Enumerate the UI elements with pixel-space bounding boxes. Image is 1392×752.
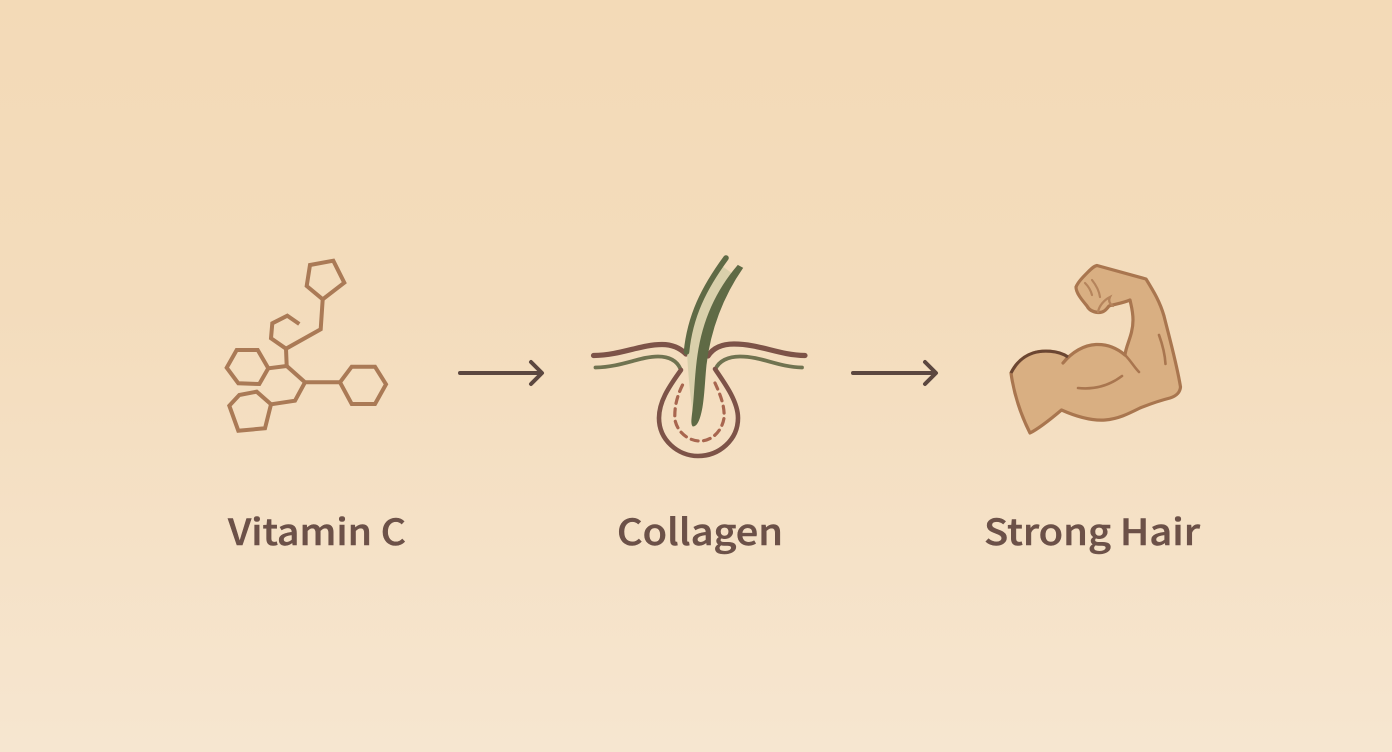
fist details <box>1085 280 1113 312</box>
brown skin line and follicle bulb <box>594 344 805 356</box>
hair strand right <box>692 266 742 426</box>
hair shaft <box>687 266 733 424</box>
arrow: vitamin C to collagen <box>460 362 542 384</box>
arm silhouette <box>1011 266 1180 433</box>
icon: flexed arm <box>1011 266 1180 433</box>
label: Collagen: Collagen <box>617 504 783 556</box>
icon: hair follicle <box>594 258 805 456</box>
muscle creases <box>1078 335 1166 388</box>
arrow: collagen to strong hair <box>853 362 936 384</box>
icon: vitamin C molecule <box>227 261 386 431</box>
shoulder shadow <box>1011 351 1068 373</box>
follicle inner dashed sheath <box>675 383 724 441</box>
label: Vitamin C: Vitamin C <box>227 504 406 556</box>
label: Strong Hair: Strong Hair <box>984 504 1200 556</box>
hair strand left <box>686 258 726 352</box>
green skin lines <box>596 356 802 369</box>
